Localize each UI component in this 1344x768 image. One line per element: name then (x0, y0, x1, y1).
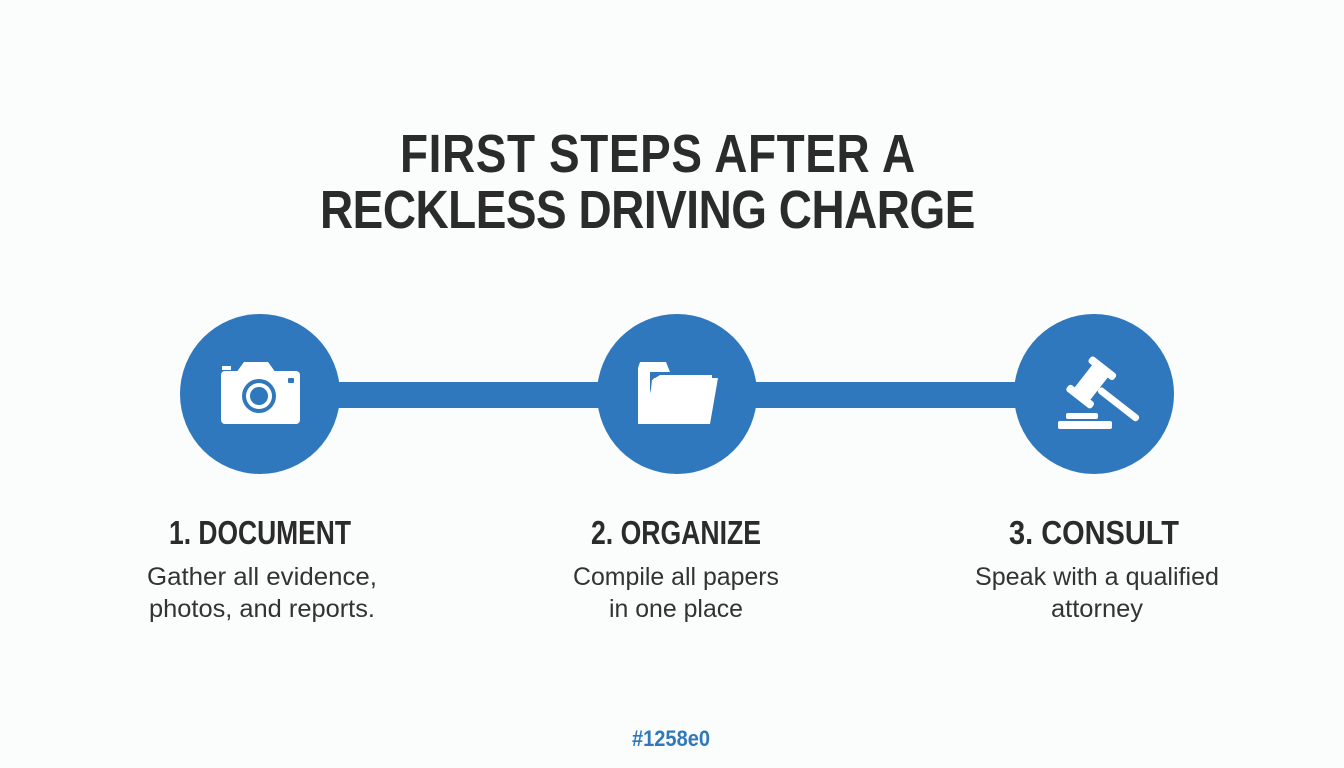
step 1 text: Gather all evidence, (147, 563, 377, 591)
step 3 text: attorney (1051, 595, 1143, 623)
icon: camera (221, 362, 300, 424)
icon: gavel (1058, 355, 1152, 437)
step 1 circle: camera (180, 314, 340, 474)
title: RECKLESS DRIVING CHARGE (320, 180, 975, 240)
footer color code: #1258e0 (632, 726, 710, 751)
step 1 text (147, 514, 377, 623)
step 1 text: photos, and reports. (149, 595, 375, 623)
step 2 text: 2. ORGANIZE (591, 514, 761, 551)
icon: folder (638, 362, 718, 424)
step 3 text: 3. CONSULT (1009, 514, 1179, 551)
step 2 text (573, 514, 779, 623)
step 3 circle: gavel (1014, 314, 1174, 474)
step 2 text: in one place (609, 595, 743, 623)
step 1 text: 1. DOCUMENT (169, 514, 351, 551)
connector bar (300, 382, 1060, 408)
title (320, 124, 975, 240)
title: FIRST STEPS AFTER A (400, 124, 915, 184)
step 3 text (975, 514, 1219, 623)
step 2 text: Compile all papers (573, 563, 779, 591)
step 3 text: Speak with a qualified (975, 563, 1219, 591)
step 2 circle: folder (597, 314, 757, 474)
